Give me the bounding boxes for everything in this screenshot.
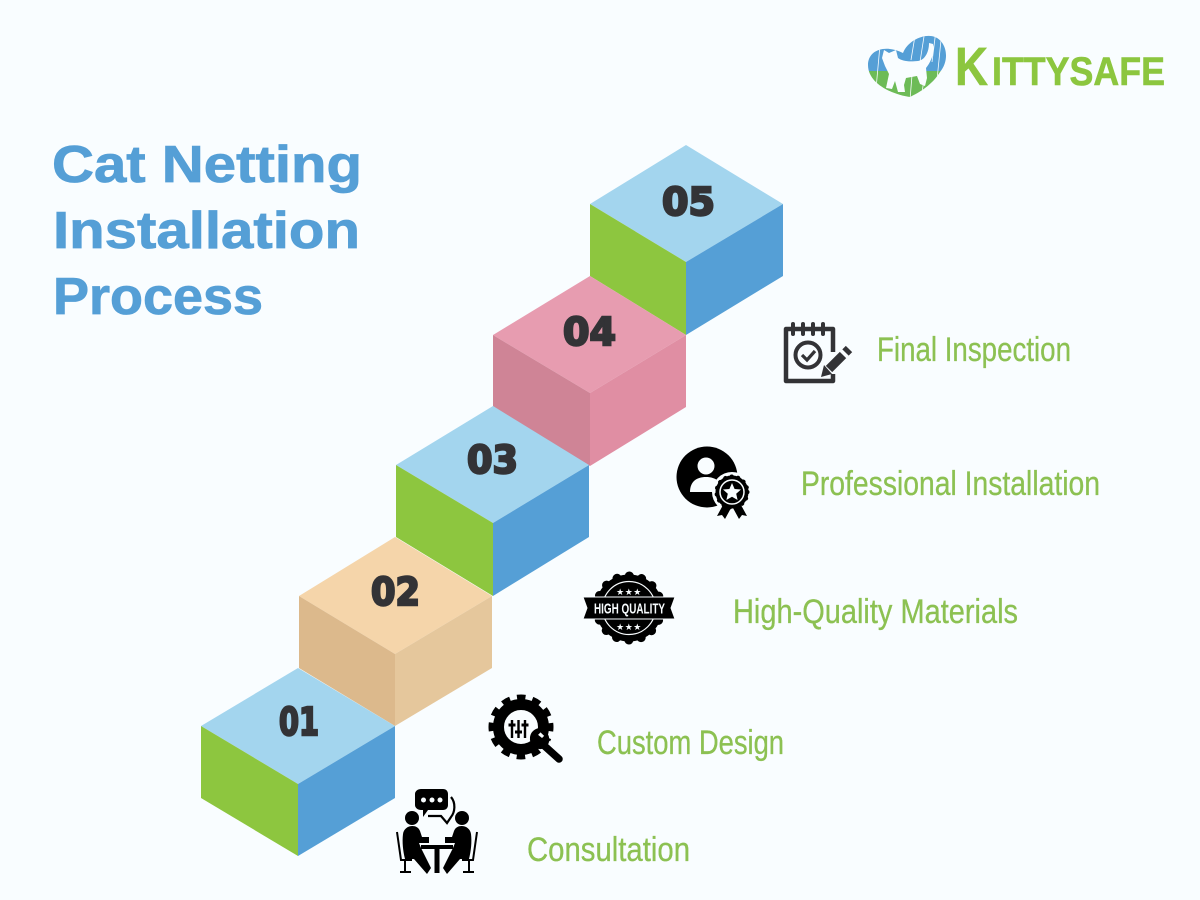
label: Professional Installation: Professional Installation bbox=[801, 465, 1100, 503]
step cube 02 bbox=[299, 537, 492, 726]
icon: notepad with check and pencil bbox=[786, 324, 849, 381]
logo wordmark: K bbox=[955, 37, 988, 97]
logo wordmark: ITTYSAFE bbox=[992, 50, 1165, 94]
title: Cat Netting bbox=[52, 136, 362, 194]
title bbox=[52, 136, 362, 326]
icon: high quality badge: ★★★ bbox=[616, 623, 642, 633]
step cube 02: 02 bbox=[371, 570, 420, 614]
step cube 01: 01 bbox=[279, 700, 319, 744]
icon: high quality badge: ★★★ bbox=[616, 588, 642, 598]
icon: high quality badge bbox=[583, 574, 675, 642]
step cube 05 bbox=[590, 145, 783, 335]
step cube 04 bbox=[493, 276, 686, 466]
label: High-Quality Materials: High-Quality Materials bbox=[733, 593, 1018, 631]
step cube 04: 04 bbox=[563, 310, 616, 354]
icon: person with award badge bbox=[676, 446, 752, 519]
title: Process bbox=[53, 268, 263, 326]
step cube 05: 05 bbox=[662, 180, 715, 224]
icon: high quality badge: HIGH QUALITY bbox=[594, 600, 665, 618]
logo: KittySafe bbox=[868, 36, 1164, 97]
label: Custom Design: Custom Design bbox=[597, 724, 784, 762]
label: Consultation: Consultation bbox=[527, 831, 690, 869]
title: Installation bbox=[53, 202, 360, 260]
logo wordmark bbox=[955, 37, 1165, 97]
icon: gear with sliders and wrench bbox=[493, 699, 562, 762]
icon: heart with cat bbox=[868, 36, 946, 97]
icon: two people at table with speech bubbles bbox=[397, 789, 477, 874]
label: Final Inspection: Final Inspection bbox=[877, 331, 1071, 369]
step cube 01 bbox=[201, 668, 395, 856]
step cube 03 bbox=[396, 406, 589, 596]
step cube 03: 03 bbox=[467, 438, 518, 482]
